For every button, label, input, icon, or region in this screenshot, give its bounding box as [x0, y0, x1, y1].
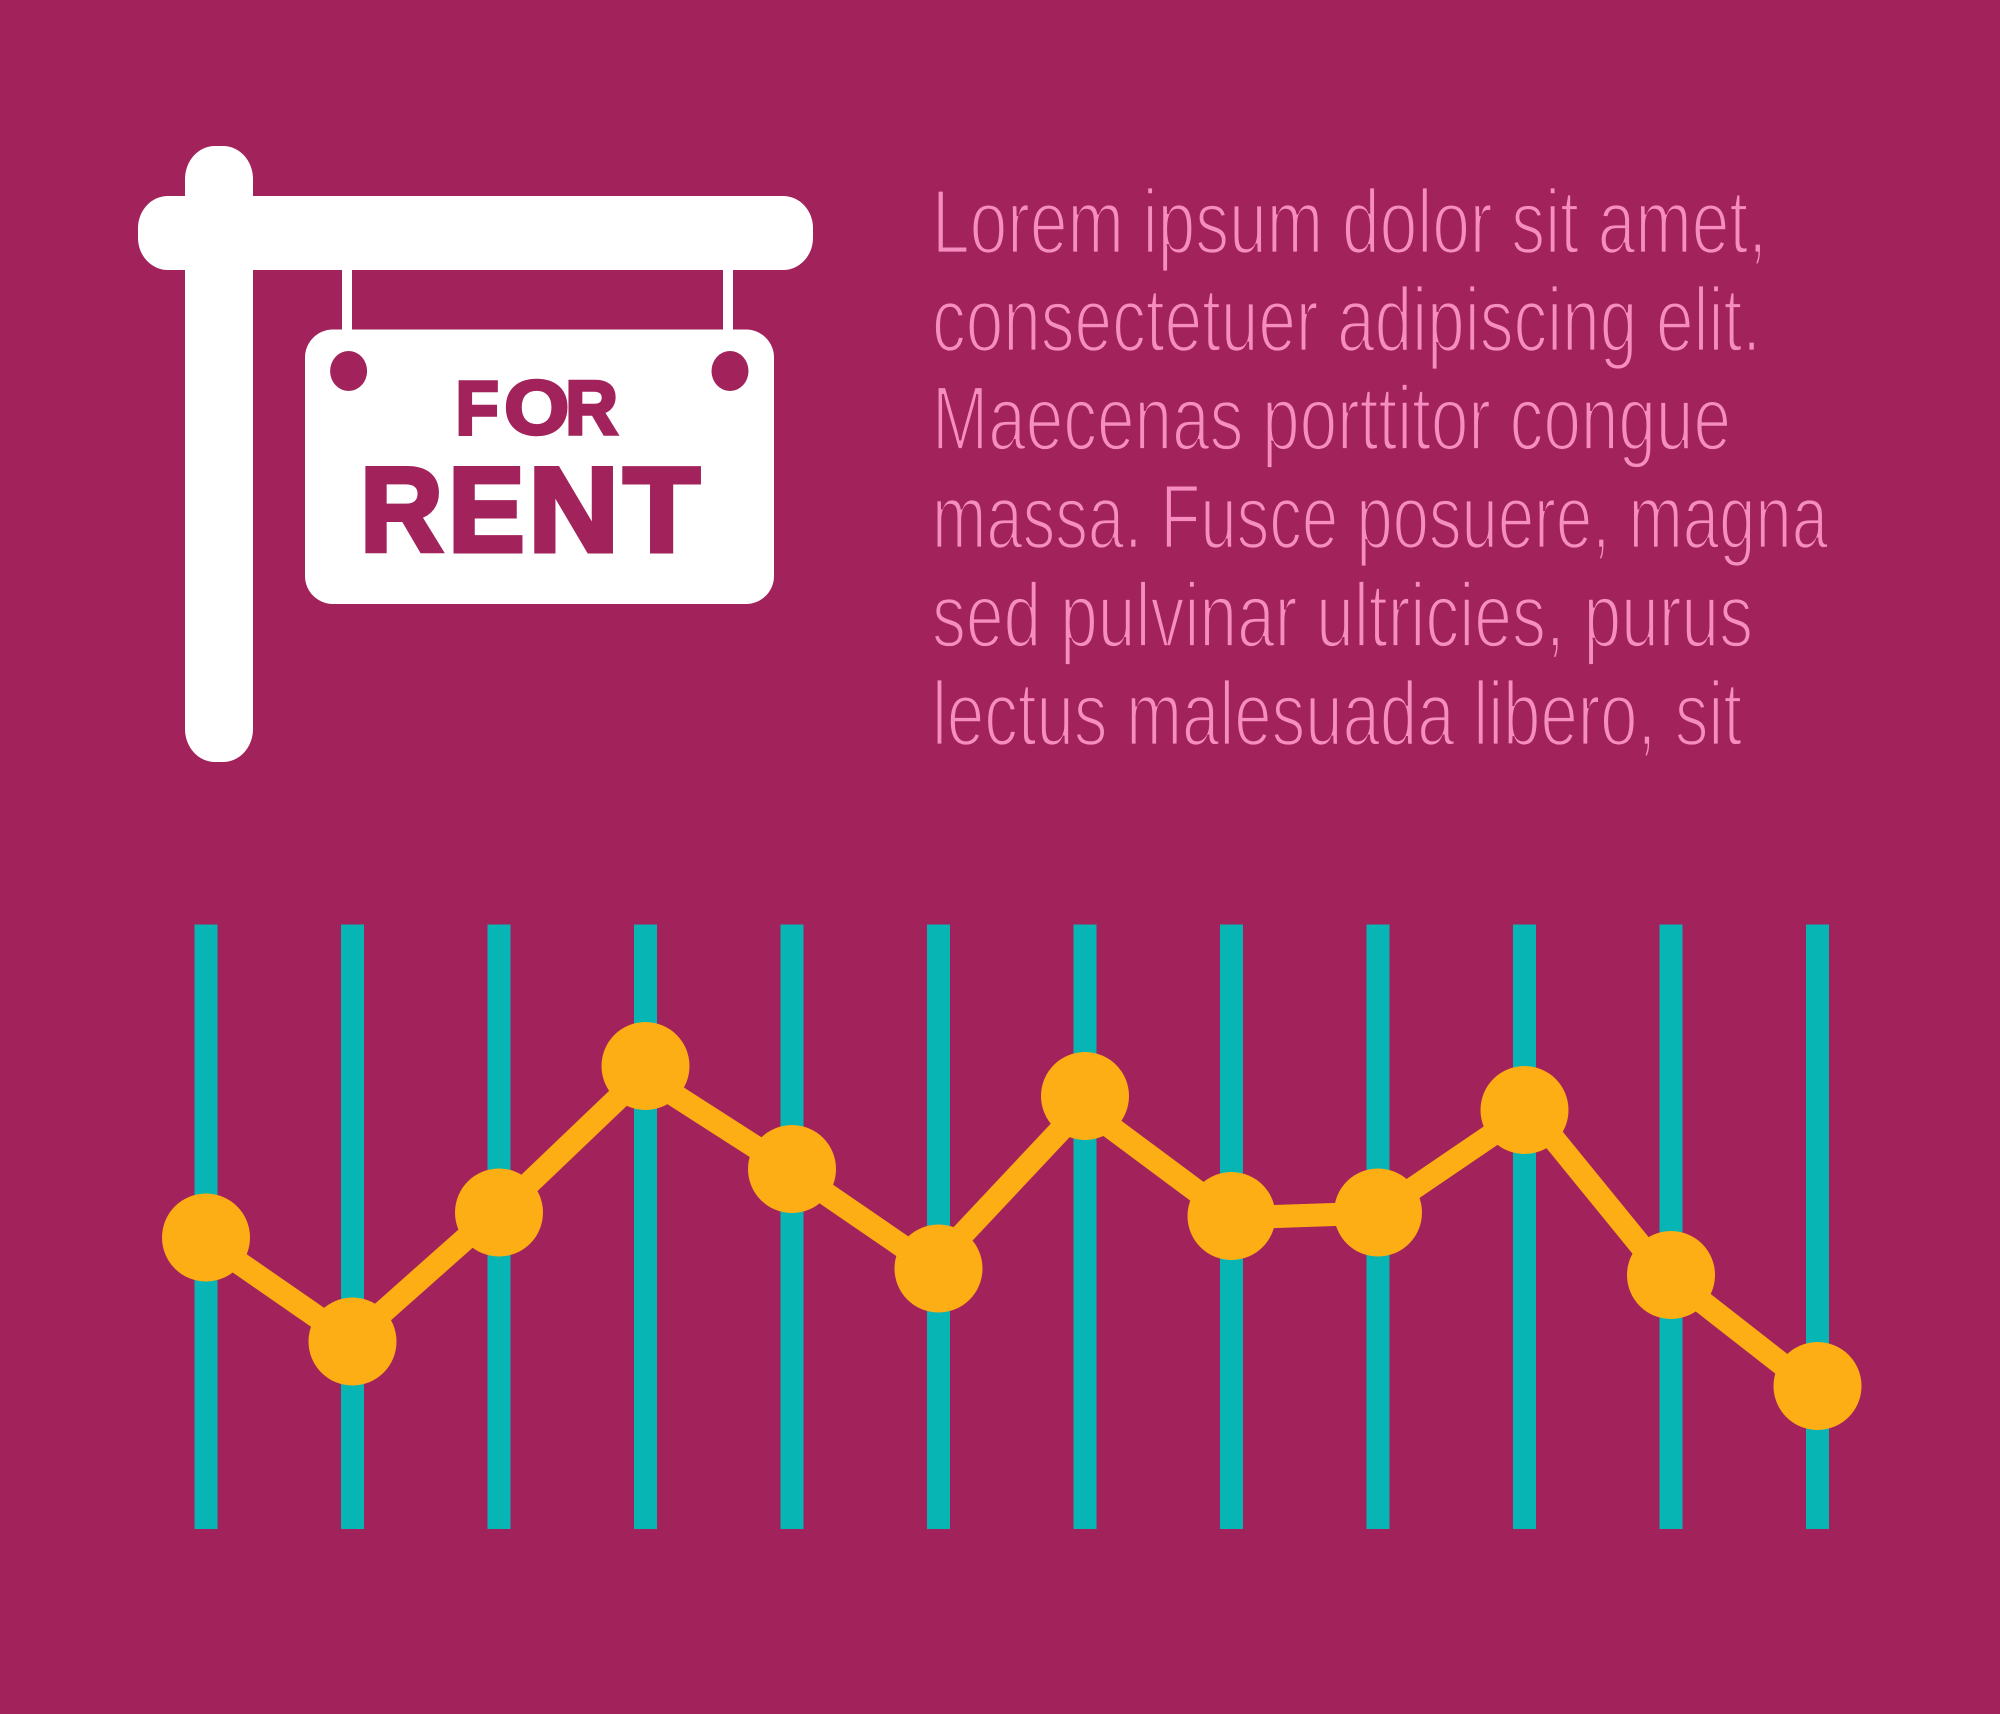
- left hole: [330, 351, 367, 391]
- left hanger: [342, 268, 352, 332]
- line chart: [162, 924, 1862, 1529]
- sign text: FOR: O: [504, 366, 569, 451]
- sign post: [185, 146, 253, 762]
- vertical teal bars: [194, 924, 1829, 1529]
- sign text: FOR: R: [565, 366, 618, 451]
- sign text: RENT: R: [360, 443, 443, 577]
- sign crossbar: [138, 196, 813, 270]
- sign text: RENT: N: [528, 443, 619, 577]
- sign text: RENT: T: [624, 443, 700, 577]
- sign text: RENT: E: [448, 443, 525, 577]
- right hole: [712, 351, 748, 391]
- text block: lorem ipsum: [932, 172, 1828, 765]
- sign board: [305, 330, 774, 604]
- text line 3: Maecenas porttitor congue: [932, 368, 1731, 470]
- sign text: FOR: F: [456, 366, 499, 451]
- icon: for rent sign: [138, 146, 813, 762]
- orange data points: [162, 1022, 1862, 1430]
- right hanger: [723, 268, 733, 332]
- text line 6: lectus malesuada libero, sit: [932, 664, 1742, 765]
- orange trend line: [206, 1072, 1818, 1392]
